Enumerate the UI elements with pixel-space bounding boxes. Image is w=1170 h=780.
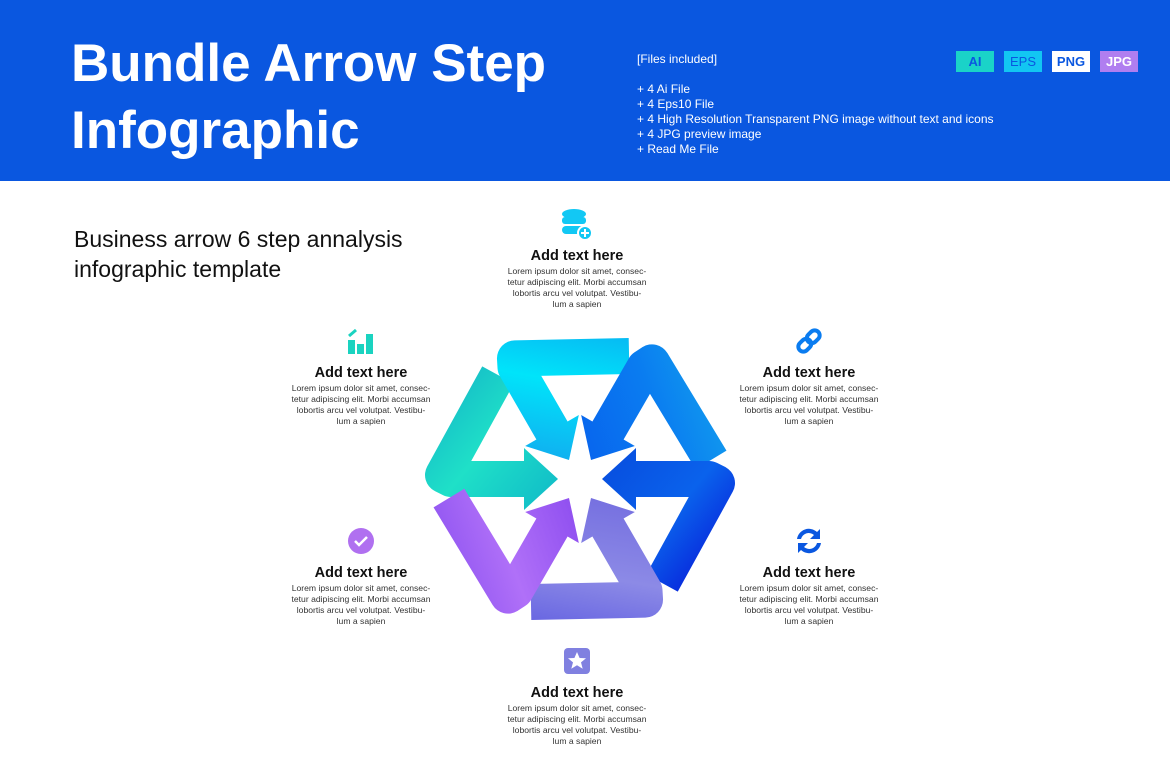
format badges [956,51,1138,72]
arrow 6 purple [421,446,596,613]
step lower left: tetur adipiscing elit. Morbi accumsan [292,594,430,604]
step top: lum a sapien [553,299,601,309]
step upper right: tetur adipiscing elit. Morbi accumsan [740,394,878,404]
arrow 3 blue [564,345,739,512]
arrow 4 dark blue [602,448,717,583]
subtitle: infographic template [74,256,281,282]
step upper left: lum a sapien [337,416,385,426]
format badges: JPG [1106,54,1132,69]
step lower right [740,528,878,626]
icon: star [564,648,590,674]
arrow 2 cyan [485,308,659,475]
icon: refresh [797,528,821,554]
step top: tetur adipiscing elit. Morbi accumsan [508,277,646,287]
title: Bundle Arrow Step [71,34,546,93]
step top [508,209,646,309]
step bottom: lum a sapien [553,736,601,746]
step lower left: lobortis arcu vel volutpat. Vestibu- [297,605,425,615]
step upper right [740,328,878,426]
step lower right: lobortis arcu vel volutpat. Vestibu- [745,605,873,615]
files list: + 4 Eps10 File [637,97,714,111]
icon: database [562,209,591,239]
subtitle: Business arrow 6 step annalysis [74,226,403,252]
header band [0,0,1170,181]
title [71,34,546,160]
files list: [Files included] [637,52,717,66]
step bottom: Lorem ipsum dolor sit amet, consec- [508,703,646,713]
step lower left [292,528,430,626]
icon: bar chart [348,328,373,354]
files list: + 4 High Resolution Transparent PNG image without text and icons [637,112,994,126]
step lower right: Add text here [763,565,855,581]
step upper left: tetur adipiscing elit. Morbi accumsan [292,394,430,404]
step upper left: lobortis arcu vel volutpat. Vestibu- [297,405,425,415]
subtitle [74,226,403,282]
step lower left: lum a sapien [337,616,385,626]
step upper right: Add text here [763,365,855,381]
files list: + Read Me File [637,142,719,156]
icon: link [796,328,822,354]
format badges: EPS [1010,54,1036,69]
step bottom: tetur adipiscing elit. Morbi accumsan [508,714,646,724]
step upper left: Add text here [315,365,407,381]
step top: lobortis arcu vel volutpat. Vestibu- [513,288,641,298]
step lower left: Add text here [315,565,407,581]
step lower right: lum a sapien [785,616,833,626]
files list: + 4 Ai File [637,82,690,96]
files list [637,52,994,156]
step lower left: Lorem ipsum dolor sit amet, consec- [292,583,430,593]
step bottom [508,648,646,746]
step upper left [292,328,430,426]
step top: Lorem ipsum dolor sit amet, consec- [508,266,646,276]
step lower right: Lorem ipsum dolor sit amet, consec- [740,583,878,593]
files list: + 4 JPG preview image [637,127,761,141]
arrow 1 teal [443,375,558,510]
step upper right: lum a sapien [785,416,833,426]
format badges: PNG [1057,54,1085,69]
arrow 5 lavender [501,483,675,650]
step upper right: Lorem ipsum dolor sit amet, consec- [740,383,878,393]
step upper left: Lorem ipsum dolor sit amet, consec- [292,383,430,393]
step upper right: lobortis arcu vel volutpat. Vestibu- [745,405,873,415]
step lower right: tetur adipiscing elit. Morbi accumsan [740,594,878,604]
step top: Add text here [531,248,623,264]
title: Infographic [71,101,360,160]
icon: check circle [348,528,374,554]
format badges: AI [968,54,982,69]
step bottom: lobortis arcu vel volutpat. Vestibu- [513,725,641,735]
step bottom: Add text here [531,685,623,701]
